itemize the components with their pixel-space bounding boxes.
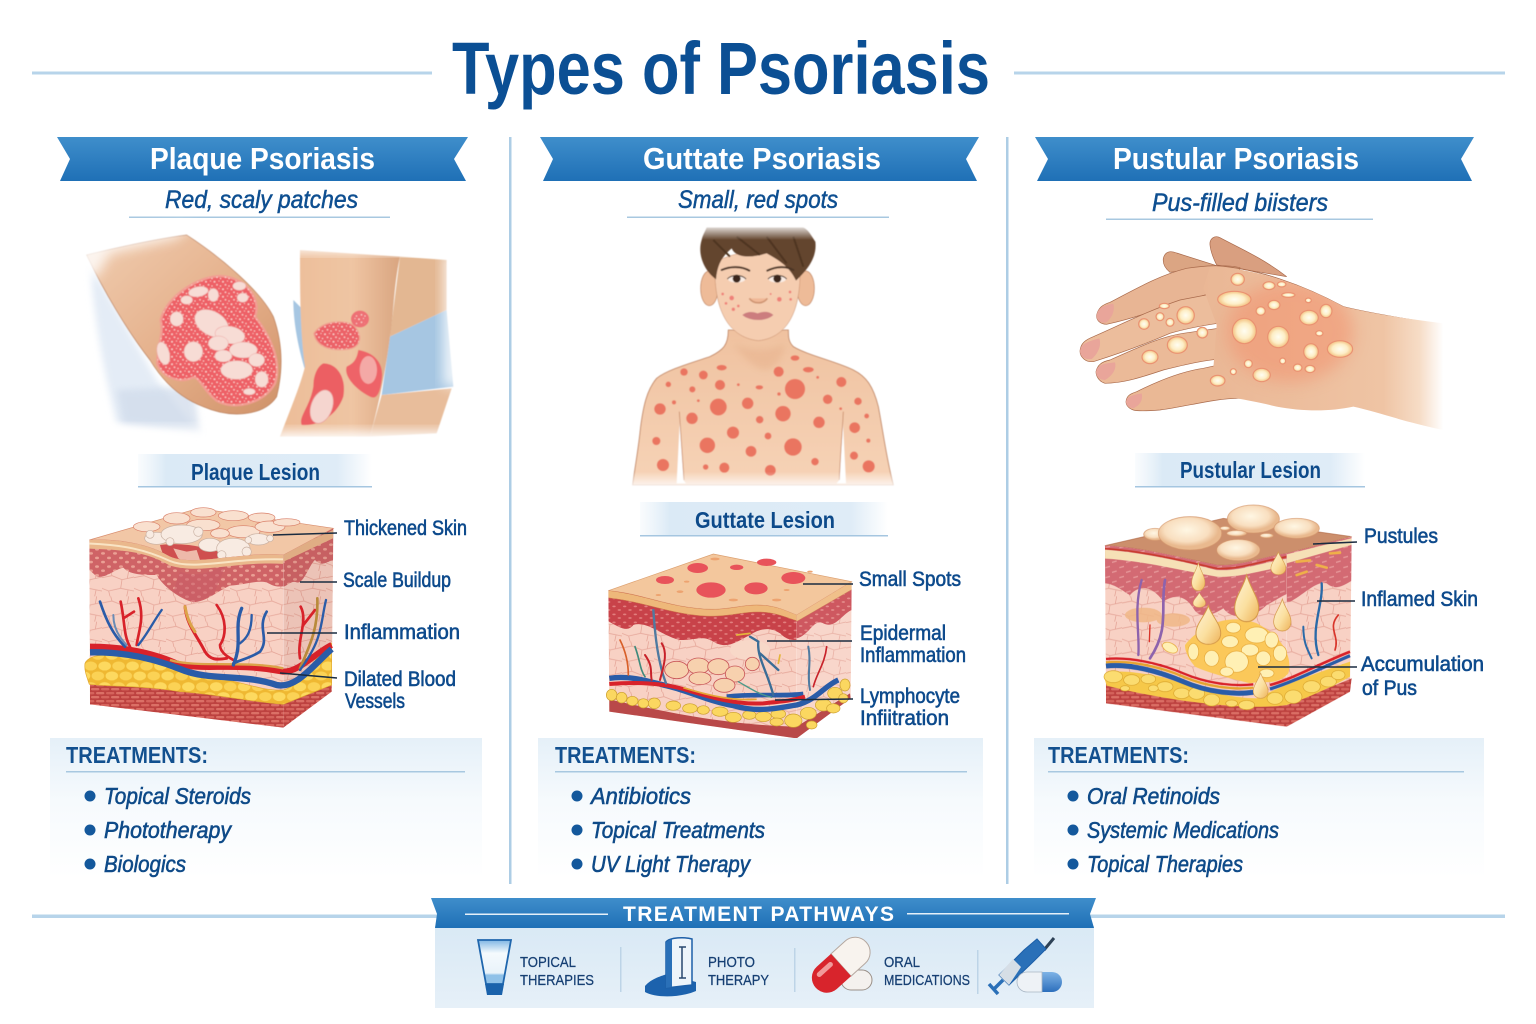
- skin block side layers: [1285, 535, 1353, 732]
- illustration: elbow and arm with plaques: [73, 223, 463, 448]
- diagram: plaque skin cross-section: [83, 508, 337, 732]
- skin block side layers: [283, 528, 334, 728]
- topical therapies label: TOPICAL: [520, 954, 576, 971]
- plaque heading ribbon: [57, 137, 468, 181]
- plaque treatments list: TREATMENTS:: [66, 742, 208, 768]
- icon: oral capsules: [806, 931, 876, 999]
- topical therapies label: [520, 954, 594, 989]
- oral medications label: MEDICATIONS: [884, 972, 970, 989]
- pustular treatments list: Systemic Medications: [1087, 817, 1279, 843]
- fat, muscle and vessels: [606, 610, 851, 738]
- diagram: pustular skin cross-section: [1100, 505, 1353, 732]
- skin block front layers: [89, 540, 284, 728]
- plaque callout labels: Vessels: [345, 690, 405, 713]
- guttate heading ribbon: Guttate Psoriasis: [643, 141, 881, 176]
- icon: syringe and capsule: [989, 938, 1062, 994]
- guttate treatments list: TREATMENTS:: [555, 742, 696, 768]
- pustular callout labels: [1361, 525, 1484, 700]
- skin block top surface: [1105, 505, 1352, 565]
- guttate callout labels: Epidermal: [860, 622, 946, 645]
- guttate treatments list: [538, 738, 983, 878]
- guttate callout labels: Lymphocyte: [860, 685, 960, 708]
- skin block side layers: [796, 582, 852, 737]
- oral medications label: ORAL: [884, 954, 920, 971]
- fat, muscle and vessels: [85, 598, 332, 728]
- illustration: hand with pustules: [1080, 237, 1443, 430]
- pustular leader lines: [1258, 542, 1357, 667]
- phototherapy label: THERAPY: [708, 972, 769, 989]
- panel: guttate psoriasis: [538, 137, 983, 878]
- plaque callout labels: Scale Buildup: [343, 569, 451, 592]
- guttate treatments list: UV Light Therapy: [591, 851, 751, 877]
- plaque callout labels: Dilated Blood: [344, 668, 456, 691]
- guttate leader lines: [767, 584, 853, 700]
- skin block top surface: [608, 554, 852, 615]
- pustular heading ribbon: Pustular Psoriasis: [1113, 141, 1359, 176]
- pustular lesion label: [1135, 453, 1365, 488]
- plaque subtitle: Red, scaly patches: [165, 186, 358, 214]
- pustular treatments list: Oral Retinoids: [1087, 783, 1220, 809]
- skin block top surface: [89, 508, 333, 576]
- panel: pustular psoriasis: [1034, 137, 1484, 878]
- guttate callout labels: Infiitration: [860, 707, 949, 730]
- plaque leader lines: [267, 533, 337, 678]
- pustular lesion label: Pustular Lesion: [1180, 457, 1321, 483]
- title: Types of Psoriasis: [452, 27, 990, 110]
- panel: plaque psoriasis: [50, 137, 482, 878]
- plaque treatments list: Topical Steroids: [104, 783, 251, 809]
- icon: topical tube: [478, 940, 511, 995]
- plaque callout labels: [343, 517, 467, 713]
- pustular callout labels: Inflamed Skin: [1361, 588, 1478, 611]
- guttate treatments list: Antibiotics: [589, 783, 691, 809]
- fat, muscle and vessels: [1104, 552, 1352, 727]
- guttate callout labels: Small Spots: [859, 568, 961, 591]
- pustular callout labels: Pustules: [1364, 525, 1438, 548]
- diagram: guttate skin cross-section: [603, 554, 857, 743]
- oral medications label: [884, 954, 970, 989]
- guttate treatments list: Topical Treatments: [591, 817, 765, 843]
- plaque treatments list: Biologics: [104, 851, 186, 877]
- icon: phototherapy unit: [645, 938, 696, 996]
- guttate heading ribbon: [540, 137, 979, 181]
- guttate callout labels: Inflammation: [860, 644, 966, 667]
- plaque treatments list: [50, 738, 482, 878]
- treatment pathways banner: TREATMENT PATHWAYS: [623, 903, 894, 926]
- pustular treatments list: TREATMENTS:: [1048, 742, 1189, 768]
- plaque treatments list: Phototherapy: [104, 817, 232, 843]
- skin block front layers: [608, 590, 797, 738]
- plaque lesion label: [138, 454, 372, 488]
- pustular heading ribbon: [1035, 137, 1474, 181]
- plaque heading ribbon: Plaque Psoriasis: [150, 141, 375, 176]
- guttate lesion label: Guttate Lesion: [695, 507, 835, 533]
- guttate lesion label: [640, 502, 888, 536]
- illustration: boy with guttate spots: [627, 224, 900, 490]
- panel: treatment pathways: [431, 898, 1096, 1008]
- skin block front layers: [1105, 546, 1287, 726]
- plaque callout labels: Thickened Skin: [344, 517, 467, 540]
- pustular treatments list: [1034, 738, 1484, 878]
- pustular subtitle: Pus-filled biisters: [1152, 189, 1328, 217]
- guttate subtitle: Small, red spots: [678, 186, 838, 214]
- guttate callout labels: [859, 568, 966, 730]
- phototherapy label: [708, 954, 769, 989]
- treatment pathways banner: [431, 898, 1096, 928]
- pustular callout labels: Accumulation: [1361, 653, 1484, 676]
- pustular callout labels: of Pus: [1362, 677, 1417, 700]
- pustular treatments list: Topical Therapies: [1087, 851, 1243, 877]
- topical therapies label: THERAPIES: [520, 972, 594, 989]
- phototherapy label: PHOTO: [708, 954, 755, 971]
- plaque callout labels: Inflammation: [344, 621, 460, 644]
- plaque lesion label: Plaque Lesion: [191, 459, 320, 485]
